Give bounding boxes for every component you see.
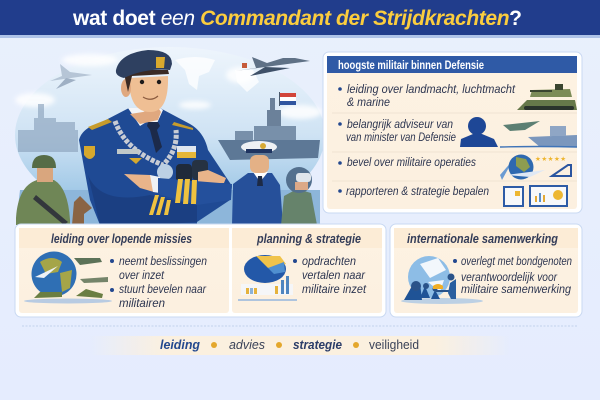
card: planning & strategie: opdrachten [302,254,356,268]
row: adviseur [338,119,456,144]
icon: grey jet, left [50,64,92,89]
row: leiding: & marine [347,97,390,109]
row: leiding [338,82,516,109]
panel: internationale samenwerking: overlegt met bondgenoten [461,256,572,268]
row: rapporteren: rapporteren & strategie bepalen [346,186,489,198]
panel: internationale samenwerking [390,224,582,317]
panel: leiding en planning [15,224,386,317]
card: planning & strategie: planning & strategie [256,232,361,246]
card: planning & strategie [232,228,382,313]
icon: officer silhouette [460,117,498,147]
keyword strip [90,336,510,355]
background scene: world map, sky and sea [15,47,325,225]
sleeve stripes [149,179,197,215]
panel: hoogste militair binnen Defensie [323,52,582,213]
icon: warship with Dutch flag, right [218,92,320,160]
card: leiding over lopende missies: over inzet [119,268,165,282]
figure: navy officer [232,141,283,225]
card: leiding over lopende missies [19,228,229,313]
figure: pilot [281,167,317,225]
chain collar [115,121,176,165]
beret [116,50,172,78]
card heading: internationale samenwerking [407,232,558,246]
icon: grey warship, left [18,104,78,152]
keyword strip: veiligheid [369,338,419,352]
panel: internationale samenwerking: militaire samenwerking [461,284,572,296]
torso [79,108,232,225]
row: adviseur: belangrijk adviseur van [347,119,453,131]
icon: globe with vehicles [24,252,112,304]
badge [84,146,95,159]
card: leiding over lopende missies: leiding over lopende missies [51,232,192,246]
forearm [158,178,232,205]
panel heading: hoogste militair binnen Defensie [338,58,484,72]
icon: ship and aircraft [500,121,577,147]
lower sleeve [88,175,197,225]
icon: globe, plane and stars: ★★★★★ [535,155,567,163]
card: planning & strategie: vertalen naar [302,268,366,282]
title banner: wat doet een Commandant der Strijdkrachten? [72,7,522,30]
card: leiding over lopende missies: neemt beslissingen [119,254,207,268]
shirt and tie [128,108,163,136]
row: leiding: leiding over landmacht, luchtmacht [347,82,516,96]
icon: fighter jet, right [235,57,310,76]
icon: pie chart and bars [238,255,297,301]
row: adviseur: van minister van Defensie [346,132,456,144]
figure: commander [79,50,232,225]
hero illustration: commander with armed forces [15,47,325,225]
card: leiding over lopende missies: stuurt bevelen naar [119,282,207,296]
panel heading [327,56,577,73]
figure: soldier with dog [16,155,92,225]
title banner [0,0,600,38]
icon: clipboard and chart [504,186,567,206]
icon: globe, plane and stars [500,154,571,180]
icon: globe with people at table [401,256,483,304]
hands and cuff [124,174,160,192]
keyword strip: advies [229,338,265,352]
ribbons [177,146,196,158]
panel: internationale samenwerking: verantwoordelijk voor [461,272,558,284]
icon: tank [517,84,577,110]
epaulettes [88,119,193,130]
head [130,106,161,124]
keyword strip: strategie [293,338,342,352]
card: planning & strategie: militaire inzet [302,282,367,296]
binoculars [176,164,192,184]
keyword strip: leiding [160,337,200,352]
row: operaties: bevel over militaire operaties [347,157,476,169]
card: leiding over lopende missies: militairen [119,296,165,310]
